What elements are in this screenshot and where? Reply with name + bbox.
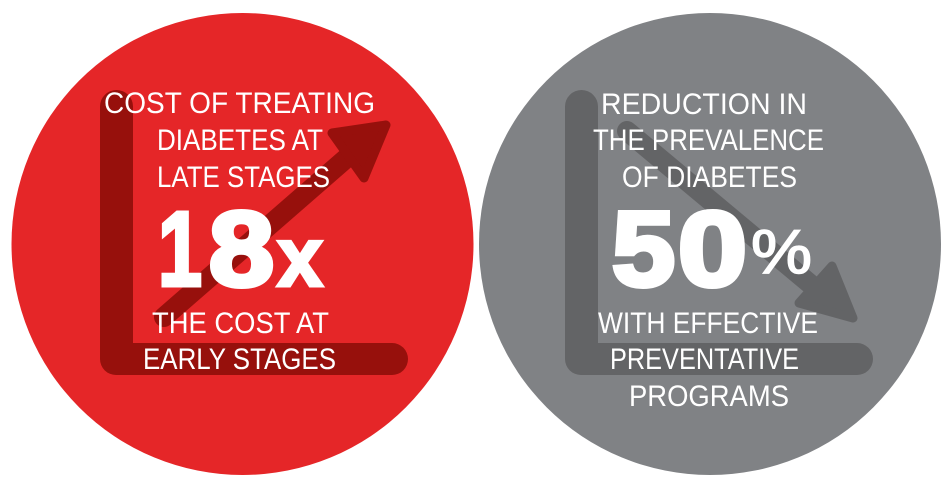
text: cost of treating diabetes at late stages: DIABETES AT (157, 124, 323, 157)
icon: falling arrow (627, 131, 853, 318)
text: the cost at early stages: THE COST AT (152, 307, 329, 340)
panel: prevalence reduction (479, 13, 941, 475)
text: reduction in the prevalence of diabetes: OF DIABETES (622, 161, 797, 194)
icon: chart axes gray (565, 90, 873, 375)
text: the cost at early stages (143, 307, 336, 376)
big number: 50%: 0 (678, 190, 747, 308)
icon: rising arrow (164, 125, 386, 317)
text: cost of treating diabetes at late stages (104, 87, 375, 194)
panel: late-stage treatment cost (12, 13, 474, 475)
big number: 18x (158, 190, 323, 308)
text: with effective preventative programs: PROGRAMS (629, 380, 789, 413)
big number: 50%: % (751, 218, 812, 287)
big number: 18x: x (277, 210, 323, 304)
text: cost of treating diabetes at late stages: COST OF TREATING (104, 87, 375, 120)
gray circle background (479, 13, 941, 475)
big number: 18x: 1 (158, 190, 202, 308)
text: reduction in the prevalence of diabetes (593, 88, 824, 194)
big number: 50% (612, 190, 812, 308)
red circle background (12, 13, 474, 475)
text: with effective preventative programs: PREVENTATIVE (610, 343, 799, 376)
text: reduction in the prevalence of diabetes: REDUCTION IN (601, 88, 807, 121)
big number: 50%: 5 (612, 190, 675, 308)
text: reduction in the prevalence of diabetes: THE PREVALENCE (593, 124, 824, 157)
big number: 18x: 8 (209, 190, 274, 308)
text: with effective preventative programs: WITH EFFECTIVE (598, 307, 818, 340)
text: the cost at early stages: EARLY STAGES (143, 343, 336, 376)
icon: chart axes red (100, 90, 408, 375)
text: cost of treating diabetes at late stages: LATE STAGES (157, 161, 330, 194)
text: with effective preventative programs (598, 307, 818, 413)
